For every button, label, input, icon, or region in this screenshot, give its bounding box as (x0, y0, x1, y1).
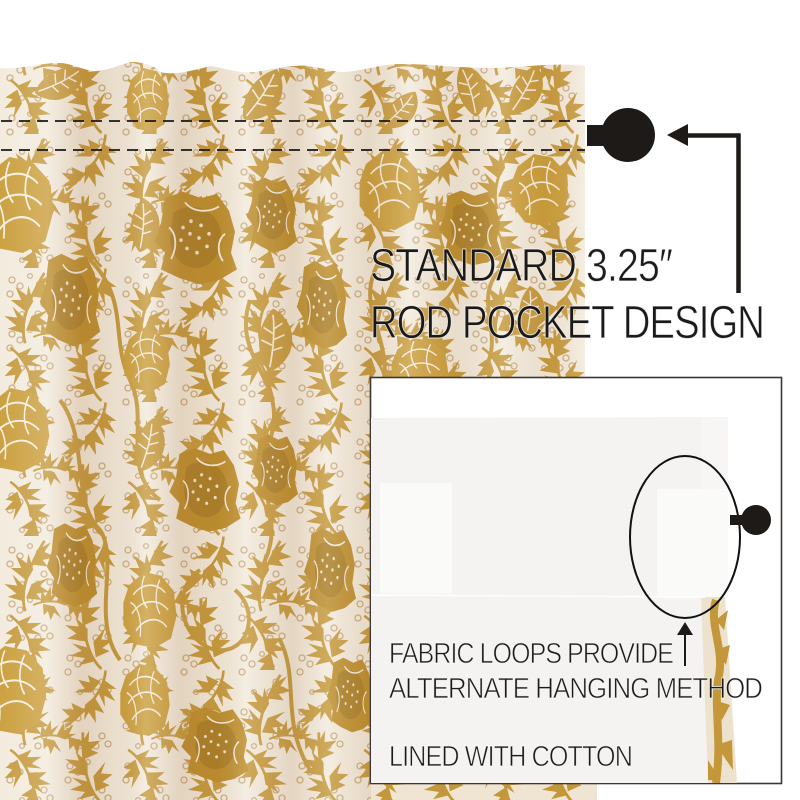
icon: small rod end (730, 505, 771, 535)
label: lined with cotton: LINED WITH COTTON (389, 741, 632, 773)
fabric loop: left (380, 483, 452, 593)
curtain panel with floral print (0, 55, 597, 800)
label: fabric loops (389, 638, 762, 705)
panel: inset showing curtain back (370, 378, 782, 784)
printed fabric strip at the curtain edge (700, 597, 737, 783)
lower tail of curtain below the inset (371, 783, 597, 800)
circle highlighting the loop (630, 456, 740, 618)
heading: rod pocket design (370, 239, 764, 348)
fabric loop: right (657, 489, 728, 597)
arrow: elbow pointing to the rod (667, 124, 738, 293)
icon: curtain rod end with finial (587, 108, 655, 162)
rod pocket dashed guide lines (1, 121, 585, 150)
heading: rod pocket design: STANDARD 3.25″ (370, 239, 673, 291)
label: fabric loops: ALTERNATE HANGING METHOD (389, 673, 762, 705)
arrow: pointing up to the loop (677, 622, 693, 666)
cotton lining (371, 417, 728, 783)
label: fabric loops: FABRIC LOOPS PROVIDE (389, 638, 674, 670)
